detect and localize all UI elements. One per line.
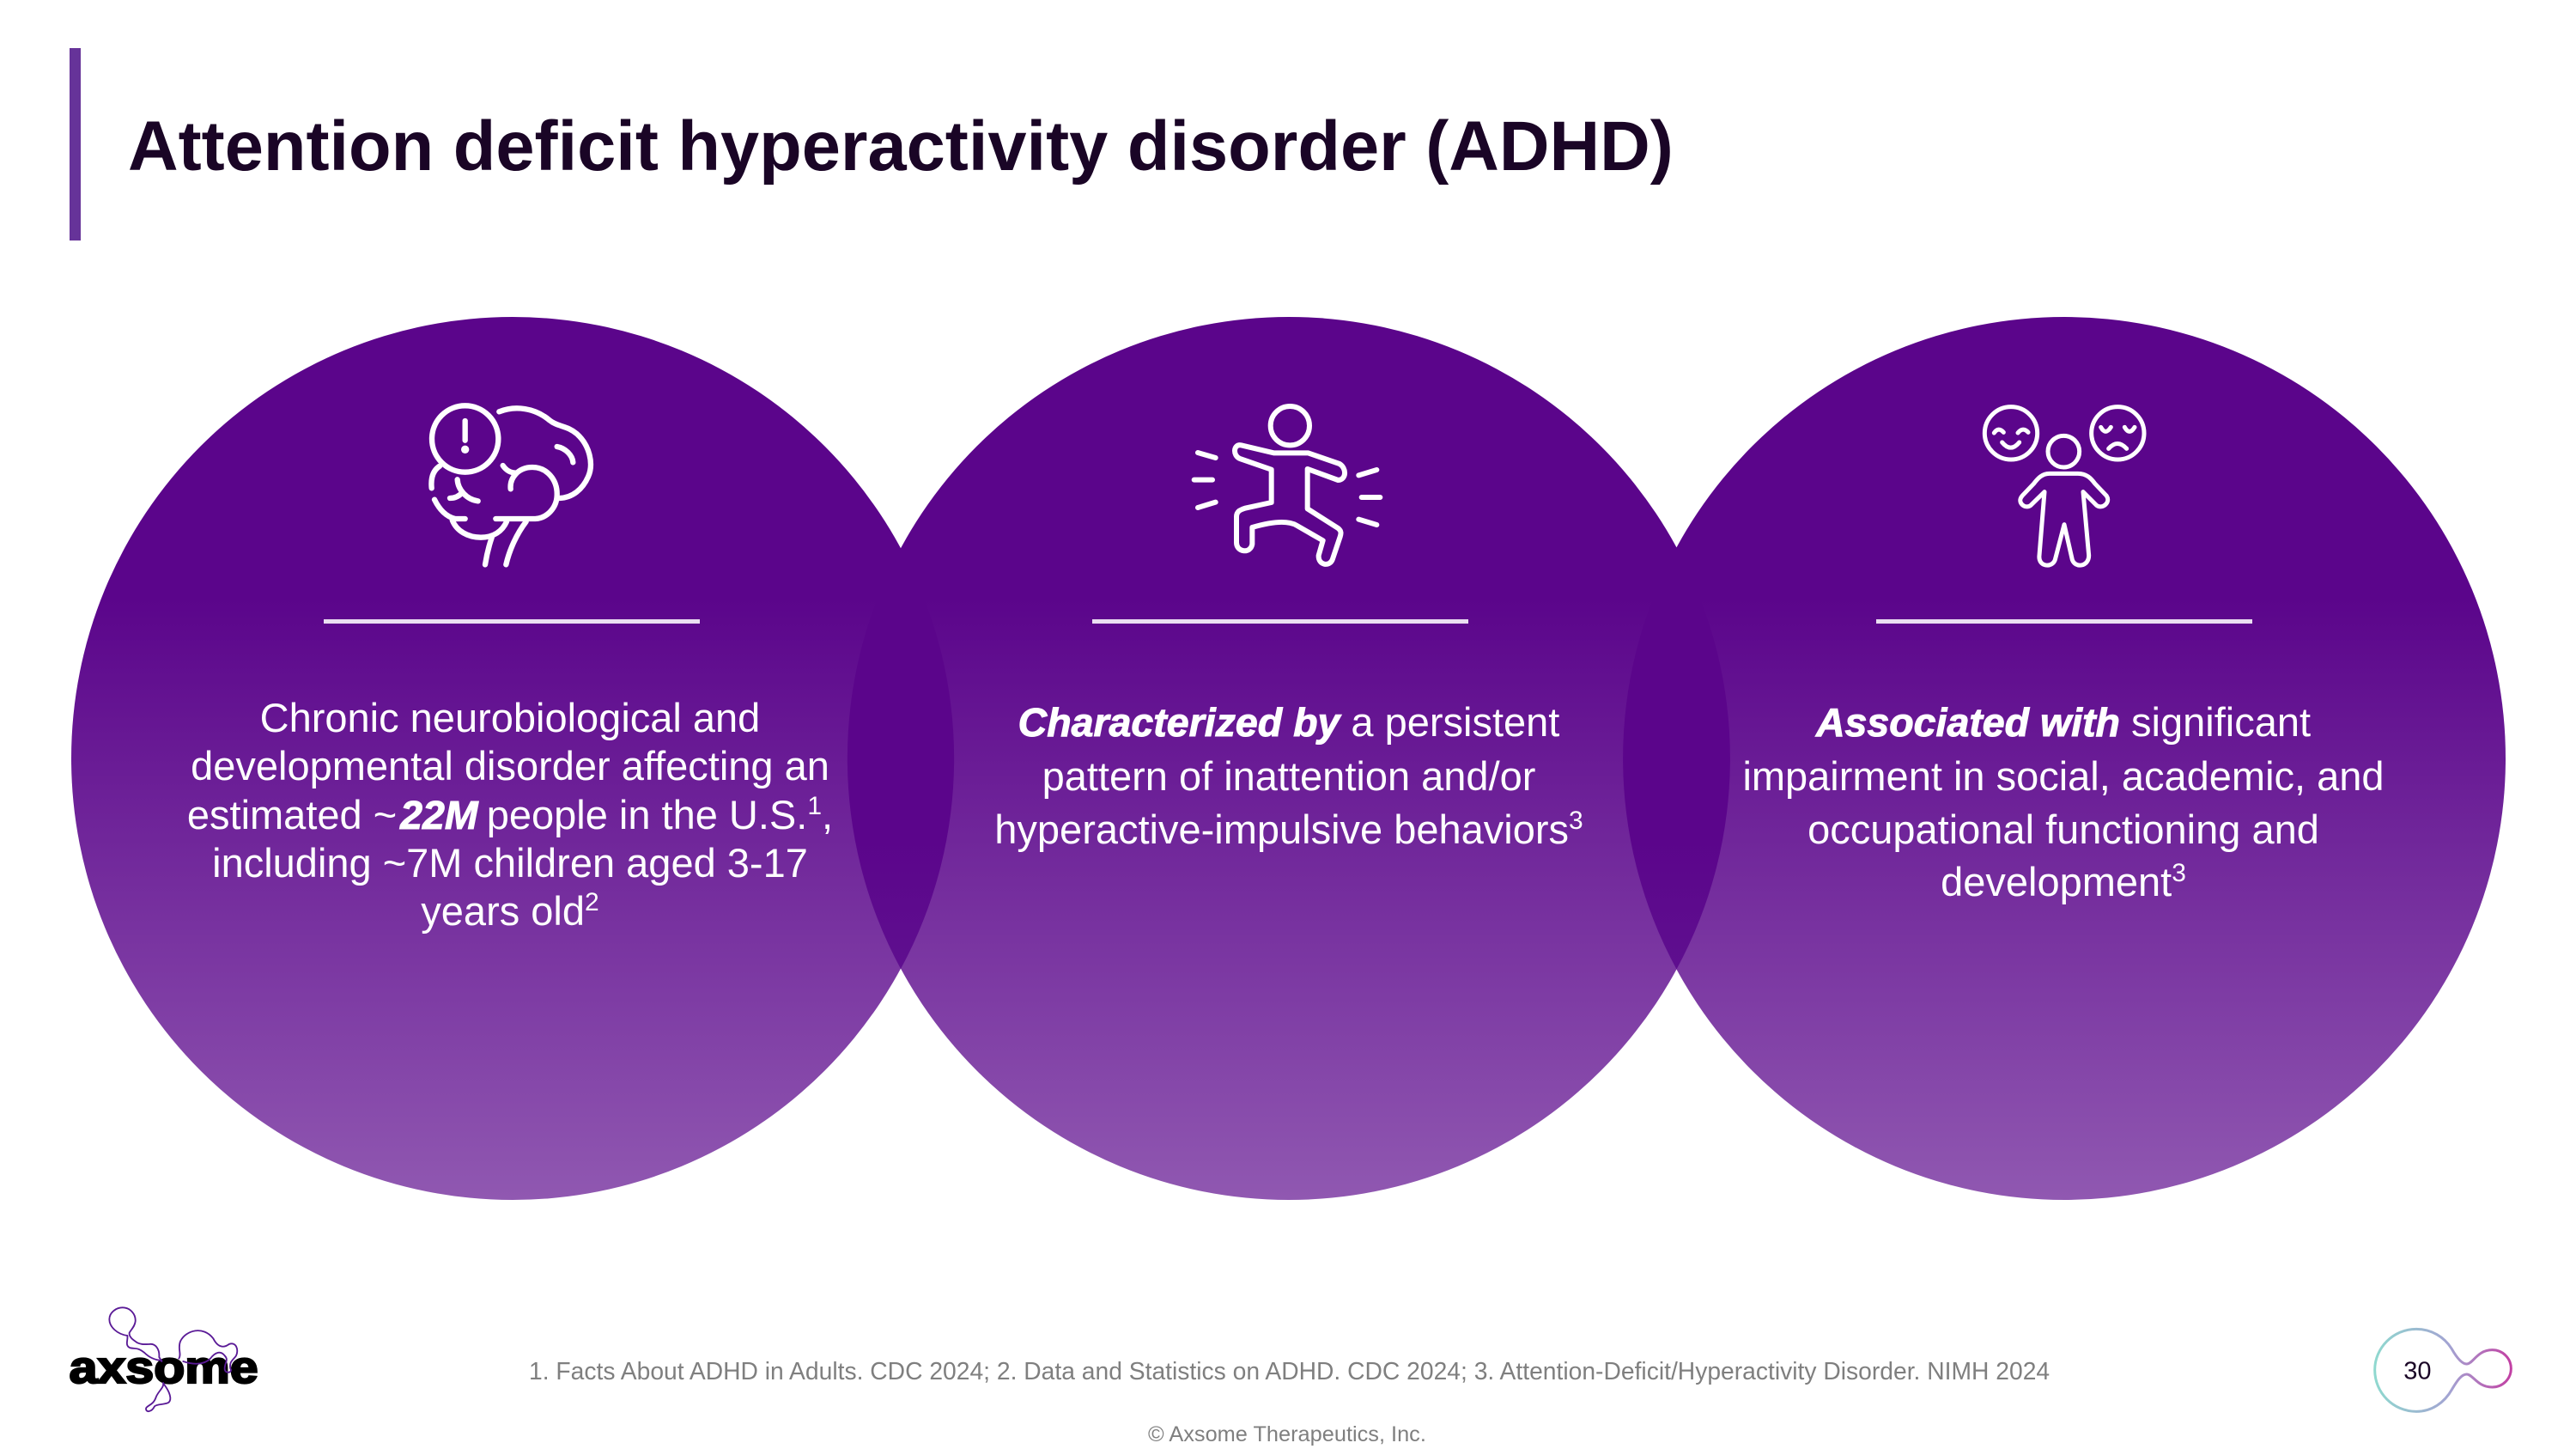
page number: 30 <box>2403 1358 2431 1385</box>
text: associated with: impairment in social, academic, and <box>1742 753 2385 799</box>
title accent bar <box>70 48 81 240</box>
panel: characterized by <box>848 317 1730 1200</box>
text: characterized by: hyperactive-impulsive behaviors3 <box>994 807 1583 852</box>
text: associated with: Associated with significant <box>1816 699 2311 745</box>
text: characterized by <box>994 699 1583 852</box>
logo molecule line <box>109 1307 237 1411</box>
text: disorder description: estimated ~22M people in the U.S.1, <box>187 792 833 837</box>
text: disorder description: developmental disorder affecting an <box>191 743 829 788</box>
text: disorder description: including ~7M children aged 3-17 <box>212 840 808 886</box>
page number badge <box>2373 1328 2512 1413</box>
text: associated with <box>1742 699 2385 904</box>
icon: brain with alert <box>428 403 594 567</box>
text: disorder description: years old2 <box>421 888 599 934</box>
logo wordmark: axsome <box>70 1342 258 1393</box>
divider <box>324 619 700 624</box>
panel: chronic disorder <box>71 317 954 1200</box>
copyright: © Axsome Therapeutics, Inc. <box>1148 1422 1426 1446</box>
text: characterized by: Characterized by a persistent <box>1018 699 1559 745</box>
divider <box>1092 619 1468 624</box>
text: associated with: development3 <box>1941 859 2186 904</box>
text: characterized by: pattern of inattention and/or <box>1042 753 1535 799</box>
text: associated with: occupational functioning and <box>1807 807 2319 852</box>
icon: hyperactive figure <box>1192 404 1382 567</box>
logo: axsome <box>70 1306 258 1412</box>
text: disorder description: Chronic neurobiological and <box>260 695 760 740</box>
panel: associated with <box>1623 317 2506 1200</box>
footnote references: 1. Facts About ADHD in Adults. CDC 2024; 2. Data and Statistics on ADHD. CDC 2024; 3. Attention-Deficit/Hyperactivity Disorder. NIMH 2024 <box>529 1357 2050 1385</box>
icon: person with happy and sad faces <box>1982 405 2147 568</box>
title: Attention deficit hyperactivity disorder (ADHD) <box>128 108 1674 186</box>
divider <box>1876 619 2252 624</box>
text: disorder description <box>187 695 833 934</box>
